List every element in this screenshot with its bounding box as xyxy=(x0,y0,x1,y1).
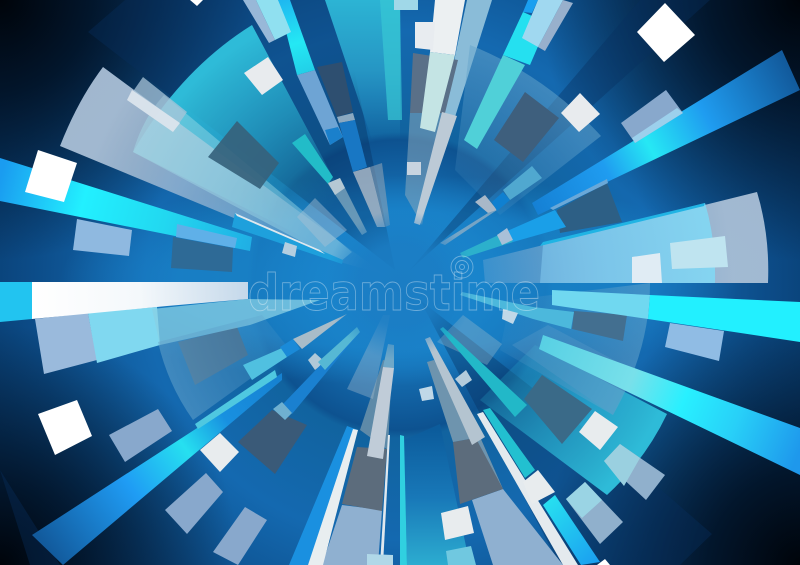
white box xyxy=(523,470,555,504)
grey strip xyxy=(243,0,275,43)
long beam xyxy=(283,327,360,414)
grey box xyxy=(621,90,683,143)
small square xyxy=(502,309,518,324)
small square xyxy=(308,353,325,370)
panel: bottom-left burst xyxy=(32,314,360,565)
tiny white xyxy=(597,559,610,565)
white square xyxy=(632,253,662,283)
light blue box on beam xyxy=(176,224,237,248)
grey fan xyxy=(347,315,390,399)
cyan left xyxy=(0,282,32,322)
grey beam tail xyxy=(328,178,367,235)
teal sector xyxy=(133,25,378,262)
white square xyxy=(38,400,92,455)
panel: top-left burst xyxy=(0,0,385,275)
steel strip xyxy=(427,360,503,489)
small square xyxy=(455,370,472,387)
cyan band top xyxy=(648,295,800,342)
white beam xyxy=(430,0,465,55)
steel beam right xyxy=(443,0,492,117)
light box xyxy=(522,0,563,47)
watermark text: dreamstime xyxy=(248,264,540,322)
dark box xyxy=(178,327,248,385)
steel ring sector xyxy=(158,315,290,420)
centre glow xyxy=(325,210,475,360)
cyan continuation xyxy=(543,495,600,565)
steel ring sector xyxy=(500,283,650,415)
small square xyxy=(497,228,513,245)
teal box xyxy=(243,348,287,380)
long cyan band xyxy=(539,335,800,475)
steel lower sector xyxy=(512,325,633,415)
taper beam xyxy=(460,292,574,329)
white diamond xyxy=(637,3,695,62)
small square xyxy=(282,242,297,257)
grey beams xyxy=(353,167,385,227)
dark box xyxy=(524,375,592,444)
steel fan xyxy=(360,360,392,450)
dark box below beam xyxy=(171,237,233,272)
watermark xyxy=(248,256,540,322)
teal beam lower xyxy=(483,408,535,478)
light square xyxy=(200,433,239,472)
dark box xyxy=(317,62,353,117)
fade sector xyxy=(152,299,320,345)
light square xyxy=(579,411,618,450)
dark box xyxy=(453,437,503,504)
box pair xyxy=(566,482,623,544)
grey long beam xyxy=(414,112,457,225)
teal tail xyxy=(460,232,513,258)
cyan edge xyxy=(540,203,705,246)
dark box xyxy=(410,53,458,113)
icon: spiral xyxy=(451,256,473,278)
light teal stripe xyxy=(380,0,402,120)
small square xyxy=(328,178,345,195)
grey beam xyxy=(425,337,485,445)
box pair xyxy=(604,444,665,500)
cyan beam xyxy=(503,12,548,65)
steel beam xyxy=(297,70,343,145)
grey box top xyxy=(127,77,187,132)
light beam xyxy=(503,166,542,200)
small white diamond xyxy=(190,0,203,6)
blue teal panel xyxy=(404,424,470,565)
light band xyxy=(552,290,650,319)
light diamond xyxy=(561,93,600,132)
blue beam xyxy=(492,192,510,211)
teal strip xyxy=(400,435,407,565)
panel: bottom-right burst xyxy=(425,283,800,565)
grey strip xyxy=(538,0,573,51)
grey fan xyxy=(297,198,347,247)
panel: bottom centre beams xyxy=(289,315,476,565)
cyan beam xyxy=(0,158,252,251)
panel: left horizontal band xyxy=(0,282,320,420)
blue tip xyxy=(325,127,343,145)
light beam xyxy=(367,367,394,459)
teal beam xyxy=(292,134,333,184)
light cyan sector xyxy=(88,307,160,363)
grey tail xyxy=(293,314,347,349)
small box xyxy=(407,162,421,175)
dark box xyxy=(238,410,307,474)
teal top sector xyxy=(325,0,400,140)
white thin line xyxy=(235,213,325,254)
teal ring sector xyxy=(480,345,667,495)
grey sector xyxy=(472,489,563,565)
light square xyxy=(244,57,283,95)
top small light xyxy=(394,0,418,10)
beam top xyxy=(383,344,394,368)
light cyan sector xyxy=(540,203,715,283)
white beam xyxy=(477,412,578,565)
dark box xyxy=(494,92,559,162)
grey fan xyxy=(405,113,445,225)
cyan beam xyxy=(278,0,315,75)
grey sector xyxy=(35,313,97,374)
thin grey strip xyxy=(550,179,608,210)
grey link xyxy=(337,113,355,123)
blue beam xyxy=(289,426,358,565)
blue beam 2 xyxy=(505,210,566,242)
light box xyxy=(670,236,728,269)
blue link xyxy=(280,339,300,357)
light strip xyxy=(632,108,683,143)
white square xyxy=(25,150,77,202)
steel ring sector xyxy=(455,45,601,215)
grey fan xyxy=(437,315,502,365)
grey boxes xyxy=(165,473,223,534)
blue beam top xyxy=(523,0,538,13)
small grey xyxy=(273,402,292,420)
panel: top-right burst xyxy=(440,0,800,283)
teal beam xyxy=(464,55,525,149)
light teal overlap xyxy=(133,95,352,262)
grey box xyxy=(109,409,172,462)
dark sector xyxy=(557,183,622,233)
white box xyxy=(415,22,435,50)
light cyan box xyxy=(256,0,291,40)
light box xyxy=(446,546,476,565)
bright beam xyxy=(532,50,800,215)
light box xyxy=(665,323,724,361)
grey big sector xyxy=(322,505,382,565)
light box xyxy=(73,219,132,256)
dark box xyxy=(572,311,627,341)
blue beam xyxy=(339,120,367,172)
panel: top centre beams xyxy=(243,0,492,227)
teal thin beam xyxy=(195,370,277,429)
small box xyxy=(367,554,393,565)
light teal beam xyxy=(420,52,455,132)
grey sector xyxy=(60,67,385,275)
big bright beam xyxy=(32,373,282,565)
dark box xyxy=(208,121,279,189)
white square xyxy=(441,506,474,540)
big grey sector xyxy=(483,192,768,283)
small square xyxy=(419,386,434,401)
white strip xyxy=(308,429,358,565)
white strip xyxy=(127,90,180,132)
thin blue beam xyxy=(232,213,343,264)
grey small box + beam xyxy=(475,195,497,213)
dark box xyxy=(342,447,387,511)
teal beam xyxy=(440,327,527,417)
thin white xyxy=(380,435,390,565)
white band xyxy=(32,282,248,319)
